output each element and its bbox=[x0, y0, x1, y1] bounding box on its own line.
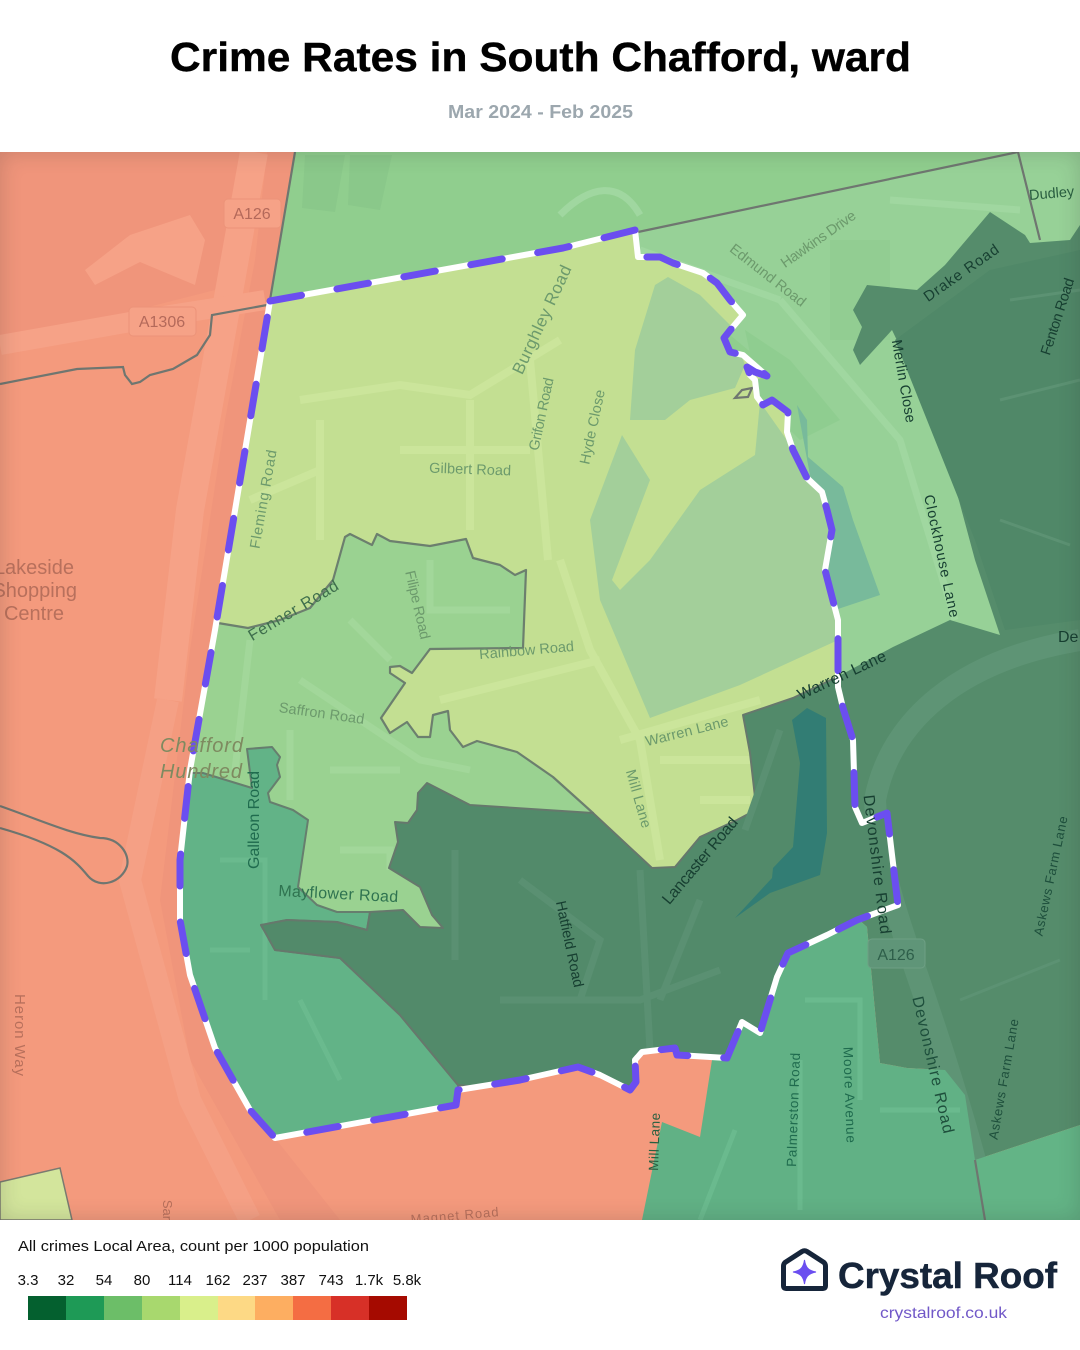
logo wordmark: Crystal Roof bbox=[838, 1255, 1058, 1296]
panel: choropleth map bbox=[0, 152, 1080, 1227]
street labels: Dudley bbox=[1028, 184, 1076, 204]
street labels: Mill Lane bbox=[646, 1113, 663, 1171]
street labels: Devonshire Road bbox=[859, 794, 893, 935]
street labels: Fenton Road bbox=[1038, 276, 1078, 357]
street labels: Sar bbox=[160, 1200, 175, 1221]
street labels: Hatfield Road bbox=[552, 899, 586, 989]
street labels: Saffron Road bbox=[278, 700, 365, 728]
legend values: 54 bbox=[96, 1272, 112, 1289]
street labels: Merlin Close bbox=[888, 339, 918, 424]
street labels: Edmund Road bbox=[726, 241, 809, 310]
zone: south-west green bbox=[183, 746, 460, 1135]
map zone: high-crime orange area bbox=[0, 152, 1080, 1220]
road shields: A126 bbox=[233, 206, 271, 223]
legend values: 162 bbox=[205, 1272, 231, 1289]
place labels bbox=[0, 557, 244, 783]
map zone: eastern dark green area bbox=[841, 212, 1080, 1160]
street labels: Hawkins Drive bbox=[778, 208, 859, 272]
zone: mid green centre bbox=[192, 532, 594, 927]
legend values: 80 bbox=[134, 1272, 150, 1289]
road shields: A1306 bbox=[139, 314, 185, 331]
ward: South Chafford zones bbox=[183, 234, 894, 1135]
street labels: Burghley Road bbox=[508, 262, 576, 377]
street labels: Filipe Road bbox=[401, 569, 433, 641]
legend values bbox=[18, 1272, 422, 1289]
legend values: 743 bbox=[318, 1272, 344, 1289]
legend values: 1.7k bbox=[355, 1272, 384, 1289]
street labels: De bbox=[1058, 629, 1079, 646]
street labels: Warren Lane bbox=[795, 648, 889, 704]
title: Crime Rates in South Chafford, ward bbox=[170, 34, 911, 80]
street labels: Mayflower Road bbox=[278, 883, 399, 906]
logo: Crystal Roof bbox=[784, 1251, 1058, 1322]
street labels: Warren Lane bbox=[644, 714, 730, 750]
street labels: Magnet Road bbox=[410, 1204, 499, 1227]
road shields bbox=[129, 199, 925, 968]
street labels: Rainbow Road bbox=[479, 639, 575, 663]
legend: colour scale bbox=[18, 1272, 422, 1320]
legend values: 32 bbox=[58, 1272, 74, 1289]
zone: yellow-green north bbox=[219, 234, 835, 867]
ward boundary: white and purple dashed bbox=[180, 230, 898, 1138]
street labels: Fleming Road bbox=[247, 449, 281, 550]
street labels: Palmerston Road bbox=[784, 1053, 803, 1167]
street labels: Gilbert Road bbox=[429, 461, 511, 479]
subtitle: date range: Mar 2024 - Feb 2025 bbox=[448, 102, 633, 122]
legend values: 237 bbox=[242, 1272, 268, 1289]
legend swatches bbox=[28, 1296, 407, 1320]
street labels: Heron Way bbox=[11, 994, 28, 1076]
map zone: north green area bbox=[270, 152, 1080, 700]
icon: house with star bbox=[784, 1251, 826, 1288]
street labels: Devonshire Road bbox=[908, 995, 956, 1135]
road shields: A126 bbox=[877, 947, 915, 964]
legend values: 114 bbox=[168, 1272, 192, 1289]
zone: dark green south bbox=[260, 677, 894, 1086]
street labels: Lancaster Road bbox=[659, 814, 742, 908]
place labels: Centre bbox=[4, 603, 64, 625]
legend title: All crimes Local Area, count per 1000 population bbox=[18, 1238, 369, 1255]
street labels: Askews Farm Lane bbox=[1031, 815, 1071, 937]
street labels: Galleon Road bbox=[246, 771, 263, 869]
website url: crystalroof.co.uk bbox=[880, 1305, 1008, 1322]
street labels: Fenner Road bbox=[246, 578, 342, 645]
zone: lake and park bbox=[590, 277, 860, 718]
legend values: 387 bbox=[280, 1272, 306, 1289]
street labels: Grifon Road bbox=[527, 376, 558, 452]
street labels: Hyde Close bbox=[577, 388, 609, 466]
area boundary lines bbox=[0, 152, 1040, 1220]
street labels: Askews Farm Lane bbox=[986, 1018, 1022, 1141]
street labels bbox=[11, 184, 1079, 1227]
street labels: Drake Road bbox=[921, 241, 1002, 306]
place labels: Chafford bbox=[160, 735, 244, 757]
legend values: 5.8k bbox=[393, 1272, 422, 1289]
street labels: Mill Lane bbox=[622, 768, 654, 830]
legend values: 3.3 bbox=[18, 1272, 38, 1289]
map zone: southern green area bbox=[642, 918, 1080, 1220]
street labels: Moore Avenue bbox=[840, 1047, 859, 1143]
place labels: Hundred bbox=[160, 761, 243, 783]
street labels: Clockhouse Lane bbox=[920, 493, 962, 619]
